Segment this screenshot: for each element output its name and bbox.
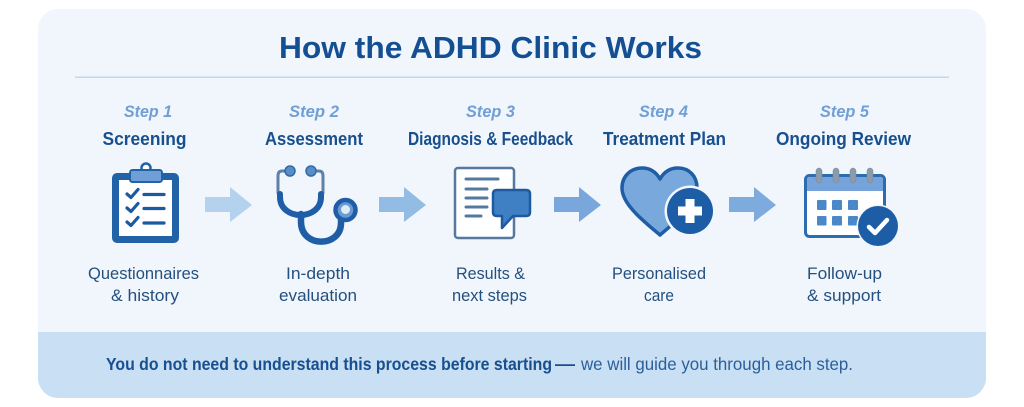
title: How the ADHD Clinic Works — [279, 30, 702, 65]
step 5: ongoing review — [776, 102, 912, 305]
step 5 label: Step 5 — [820, 102, 870, 121]
step 4 label: Step 4 — [639, 102, 689, 121]
step 5 description: Follow-up — [807, 264, 882, 283]
arrow 4 — [729, 187, 776, 222]
step 4 description: Personalised — [612, 264, 706, 283]
step 4: treatment plan: care — [644, 286, 674, 305]
icon: calendar with check badge — [806, 168, 900, 248]
icon: heart with plus badge — [622, 168, 716, 236]
step 4: treatment plan — [603, 102, 726, 305]
arrow 3 — [554, 187, 601, 222]
step 1 label: Step 1 — [124, 102, 172, 121]
step 2 description: In-depth — [286, 264, 350, 283]
banner text: You do not need to understand this process before starting — [106, 354, 552, 374]
arrow 1 — [205, 187, 252, 222]
banner text: we will guide you through each step. — [580, 354, 853, 374]
icon: stethoscope — [278, 166, 356, 242]
step 1: screening — [88, 102, 199, 305]
step 2: assessment — [265, 102, 363, 305]
banner text — [106, 354, 853, 374]
step 5 heading: Ongoing Review — [776, 129, 912, 149]
step 3 label: Step 3 — [466, 102, 516, 121]
step 1 heading: Screening — [102, 129, 186, 149]
step 3 description: Results & — [456, 264, 526, 283]
step 2 label: Step 2 — [289, 102, 340, 121]
arrow 2 — [379, 187, 426, 222]
panel: reassurance banner — [38, 332, 986, 398]
step 2: assessment: evaluation — [279, 286, 357, 305]
icon: clipboard checklist — [116, 164, 176, 240]
step 5: ongoing review: & support — [807, 286, 881, 305]
banner text: — — [555, 354, 576, 374]
step 1 description: Questionnaires — [88, 264, 199, 283]
icon: report with speech bubble — [455, 168, 530, 238]
step 1: screening: & history — [111, 286, 180, 305]
step 3: diagnosis and feedback — [408, 102, 574, 305]
step 3 heading: Diagnosis & Feedback — [408, 129, 574, 149]
step 4 heading: Treatment Plan — [603, 129, 726, 149]
step 2 heading: Assessment — [265, 129, 363, 149]
step 3: diagnosis and feedback: next steps — [452, 286, 527, 305]
